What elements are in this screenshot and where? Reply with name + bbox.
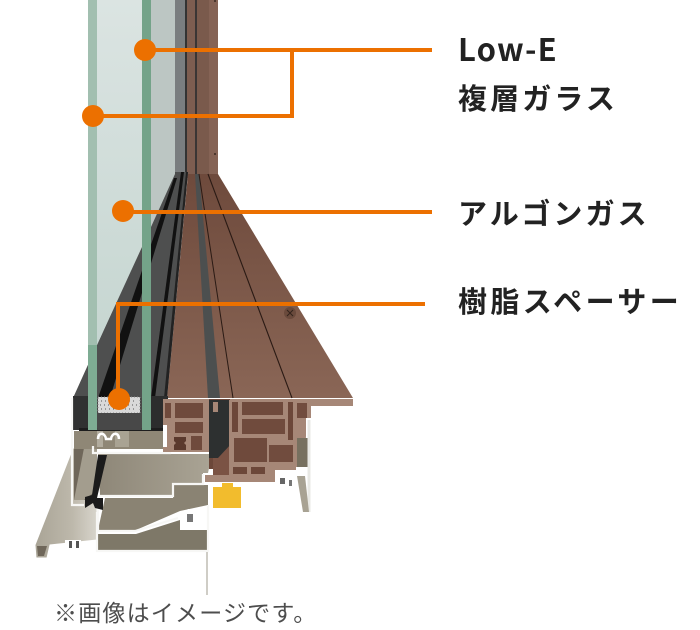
leader: argon gas — [112, 200, 432, 222]
upper channel — [74, 431, 168, 449]
dark frame channel — [73, 172, 188, 431]
left chamber — [74, 448, 94, 500]
leader: spacer — [108, 304, 425, 410]
black gasket — [85, 455, 107, 510]
glass interior — [97, 0, 142, 345]
label: resin spacer: 樹脂スペーサー — [458, 279, 682, 321]
brown frame profile — [163, 399, 353, 482]
silver frame — [35, 398, 212, 558]
glass pane: outer — [88, 0, 97, 430]
second chamber — [98, 485, 208, 530]
white profile lines — [72, 398, 208, 551]
wall reveal — [151, 0, 218, 178]
label: argon gas: アルゴンガス — [458, 191, 650, 233]
note: ※画像はイメージです。 — [54, 600, 317, 626]
spacer — [97, 397, 142, 430]
wood sill — [167, 174, 353, 398]
label: Low-E double glazing: 複層ガラス — [458, 76, 618, 118]
silver frame: right part — [280, 420, 309, 512]
label: Low-E double glazing — [458, 25, 618, 118]
yellow thermal insert — [213, 483, 241, 508]
third chamber — [96, 520, 207, 550]
label: Low-E double glazing: Low-E — [458, 25, 558, 70]
glass pane: inner — [142, 0, 151, 430]
foot line — [206, 552, 208, 595]
leader: Low-E — [82, 39, 432, 127]
main panel — [98, 454, 212, 495]
apron — [35, 448, 97, 558]
